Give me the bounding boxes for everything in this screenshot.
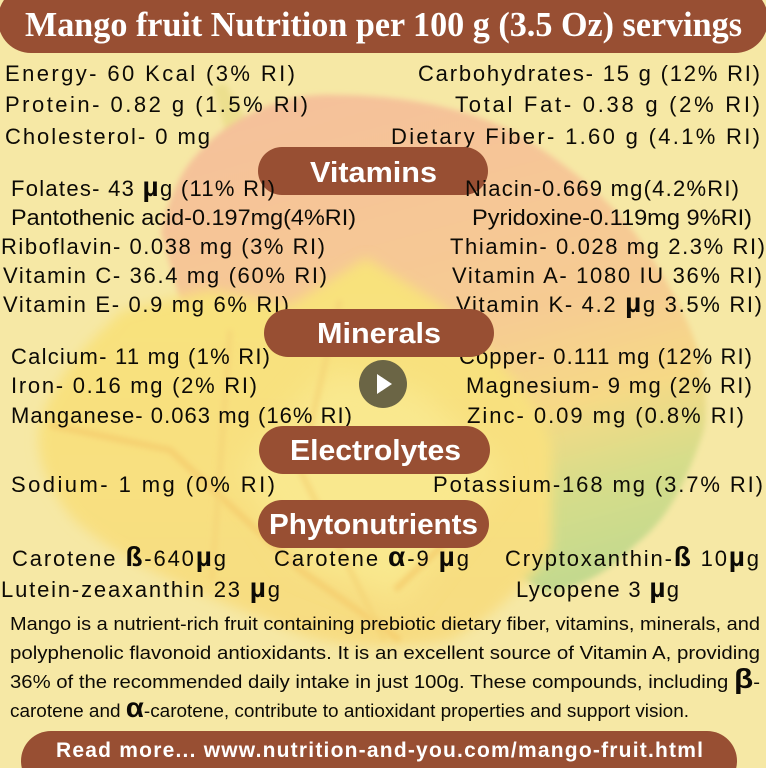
heading: Minerals: Minerals [317, 318, 441, 350]
phytonutrients list: Carotene ß-640µg [12, 541, 226, 572]
vitamins list [1, 171, 765, 318]
heading: Phytonutrients [258, 500, 489, 548]
phytonutrients list: Carotene α-9 µg [274, 541, 469, 572]
macronutrient list: Carbohydrates- 15 g (12% RI) [418, 61, 760, 86]
description text block: Mango is a nutrient-rich fruit containing prebiotic dietary fiber, vitamins, minerals, and [10, 614, 760, 634]
read more banner: Read more... www.nutrition-and-you.com/mango-fruit.html [56, 739, 703, 762]
heading: Vitamins [258, 147, 488, 195]
electrolytes list: Potassium-168 mg (3.7% RI) [433, 472, 763, 497]
vitamins list: Vitamin C- 36.4 mg (60% RI) [3, 263, 327, 288]
vitamins list: Folates- 43 µg (11% RI) [11, 171, 275, 202]
vitamins list: Thiamin- 0.028 mg 2.3% RI) [450, 234, 765, 259]
heading: Phytonutrients: Phytonutrients [269, 509, 478, 541]
vitamins list: Pantothenic acid-0.197mg(4%RI) [11, 205, 356, 230]
phytonutrients list [1, 541, 759, 603]
macronutrient list: Cholesterol- 0 mg [5, 124, 210, 149]
minerals list: Manganese- 0.063 mg (16% RI) [11, 403, 352, 428]
heading: Electrolytes: Electrolytes [290, 435, 461, 467]
macronutrient list: Protein- 0.82 g (1.5% RI) [5, 92, 308, 117]
electrolytes list [11, 472, 763, 497]
vitamins list: Niacin-0.669 mg(4.2%RI) [465, 176, 739, 201]
phytonutrients list: Lutein-zeaxanthin 23 µg [1, 572, 280, 603]
vitamins list: Riboflavin- 0.038 mg (3% RI) [1, 234, 325, 259]
read more banner [21, 731, 737, 768]
phytonutrients list: Cryptoxanthin-ß 10µg [505, 541, 759, 572]
vitamins list: Pyridoxine-0.119mg 9%RI) [472, 205, 752, 230]
macronutrient list: Total Fat- 0.38 g (2% RI) [455, 92, 760, 117]
vitamins list: Vitamin E- 0.9 mg 6% RI) [3, 292, 289, 317]
minerals list: Magnesium- 9 mg (2% RI) [466, 373, 752, 398]
macronutrient list [5, 61, 760, 149]
minerals list: Iron- 0.16 mg (2% RI) [11, 373, 257, 398]
title banner: Mango fruit Nutrition per 100 g (3.5 Oz) servings [25, 5, 742, 44]
minerals list: Copper- 0.111 mg (12% RI) [459, 344, 752, 369]
minerals list: Zinc- 0.09 mg (0.8% RI) [467, 403, 744, 428]
description text block: 36% of the recommended daily intake in just 100g. These compounds, including β- [10, 663, 760, 694]
vitamins list: Vitamin A- 1080 IU 36% RI) [452, 263, 762, 288]
macronutrient list: Energy- 60 Kcal (3% RI) [5, 61, 295, 86]
description text block: polyphenolic flavonoid antioxidants. It is an excellent source of Vitamin A, providing [10, 643, 760, 663]
description text block [10, 614, 760, 723]
minerals list [11, 344, 752, 428]
heading: Minerals [264, 309, 494, 357]
illustration: faded mango [38, 84, 706, 647]
heading: Electrolytes [259, 426, 490, 474]
vitamins list: Vitamin K- 4.2 µg 3.5% RI) [456, 287, 762, 318]
minerals list: Calcium- 11 mg (1% RI) [11, 344, 270, 369]
description text block: carotene and α-carotene, contribute to antioxidant properties and support vision. [10, 692, 689, 723]
icon: play button [359, 360, 407, 408]
phytonutrients list: Lycopene 3 µg [516, 572, 679, 603]
heading: Vitamins: Vitamins [310, 157, 437, 189]
electrolytes list: Sodium- 1 mg (0% RI) [11, 472, 275, 497]
macronutrient list: Dietary Fiber- 1.60 g (4.1% RI) [391, 124, 760, 149]
